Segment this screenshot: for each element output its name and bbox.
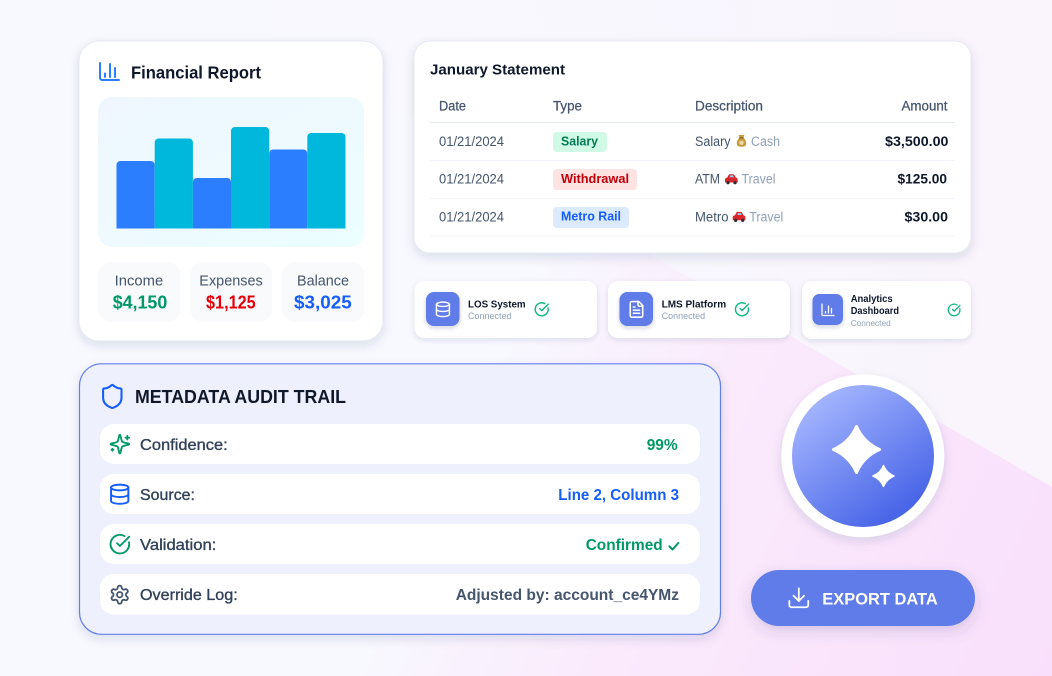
icon: check: [535, 303, 548, 316]
table row: withdrawal: $125.00: [898, 172, 947, 187]
stat: income: $4,150: [113, 292, 167, 312]
icon: car: [733, 212, 745, 222]
stat: income: Income: [115, 274, 163, 290]
card: analytics dashboard: Connected: [851, 318, 891, 328]
row: source: [100, 474, 700, 514]
table row: metro rail: $30.00: [904, 209, 948, 224]
card: analytics dashboard: Analytics: [851, 294, 893, 305]
icon: gear: [112, 586, 128, 604]
table row: withdrawal: ATM: [695, 172, 720, 187]
row: confidence: 99%: [647, 437, 678, 454]
badge: withdrawal: [553, 169, 637, 190]
table row: metro rail: 01/21/2024: [439, 209, 504, 224]
stat: expenses: [190, 262, 272, 322]
stat: balance: [282, 262, 364, 322]
row: validation: [100, 524, 700, 564]
icon: document: [620, 292, 653, 326]
row: source: Line 2, Column 3: [558, 487, 679, 504]
icon: chart: [812, 294, 843, 325]
table row: metro rail: Travel: [749, 209, 783, 224]
stat: income: [98, 262, 180, 322]
icon: sparkles: [111, 435, 129, 453]
table header: Description: [695, 98, 763, 114]
panel: january statement: [414, 41, 971, 253]
table header: [439, 98, 948, 114]
panel: metadata audit trail: [80, 364, 720, 634]
icon: large star: [834, 426, 880, 472]
stat: balance: $3,025: [294, 292, 352, 312]
badge: salary: Salary: [561, 134, 598, 148]
heading: january statement: January Statement: [430, 62, 565, 78]
bar chart: [98, 97, 364, 247]
card: LMS platform: LMS Platform: [662, 299, 726, 310]
icon: check mark: [669, 543, 678, 550]
icon: database: [111, 485, 128, 504]
table row: metro rail: Metro: [695, 209, 728, 224]
card: LOS system: [414, 281, 597, 338]
table row: salary: Salary: [695, 134, 731, 149]
table header: Amount: [902, 98, 948, 114]
badge: salary: [553, 132, 607, 152]
button: export data: EXPORT DATA: [822, 591, 938, 609]
badge: withdrawal: Withdrawal: [561, 172, 629, 186]
icon: check: [948, 304, 960, 316]
button: export data: [751, 570, 975, 626]
row: confidence: Confidence:: [140, 437, 228, 454]
card: LMS platform: Connected: [662, 311, 705, 321]
card: analytics dashboard: [802, 281, 971, 339]
icon: money bag: [737, 135, 746, 147]
icon: bar chart: [100, 63, 119, 80]
table row: salary: [439, 132, 948, 152]
table row: withdrawal: 01/21/2024: [439, 172, 504, 187]
row: override log: [100, 574, 700, 614]
icon: AI sparkle orb: [781, 374, 944, 537]
icon: download: [789, 588, 808, 607]
panel: financial report card: [79, 41, 383, 341]
table row: withdrawal: [439, 169, 947, 190]
card: LOS system: Connected: [468, 311, 512, 321]
table row: metro rail: [439, 207, 948, 228]
heading: metadata audit trail: METADATA AUDIT TRAIL: [135, 387, 346, 407]
table header: Type: [553, 98, 582, 114]
badge: metro rail: Metro Rail: [561, 210, 621, 224]
table row: salary: 01/21/2024: [439, 134, 504, 149]
row: source: Source:: [140, 487, 195, 504]
stat: balance: Balance: [297, 274, 349, 290]
row: validation: Confirmed: [586, 537, 663, 554]
icon: shield: [103, 385, 122, 408]
table header: Date: [439, 98, 466, 114]
card: LMS platform: [608, 281, 790, 338]
row: override log: Override Log:: [140, 587, 238, 604]
table row: salary: Cash: [751, 134, 780, 149]
table row: withdrawal: Travel: [742, 172, 776, 187]
row: override log: Adjusted by: account_ce4YMz: [456, 587, 679, 604]
icon: database: [426, 292, 460, 326]
row: validation: Validation:: [140, 537, 216, 554]
card: analytics dashboard: Dashboard: [851, 306, 899, 317]
stat: expenses: Expenses: [199, 274, 263, 290]
stat: expenses: $1,125: [206, 292, 256, 312]
icon: check: [736, 303, 749, 316]
icon: check circle: [111, 535, 129, 553]
icon: small star: [873, 466, 894, 486]
icon: car: [725, 174, 738, 184]
card: LOS system: LOS System: [468, 299, 526, 310]
row: confidence: [100, 424, 700, 464]
badge: metro rail: [553, 207, 629, 228]
table row: salary: $3,500.00: [885, 134, 948, 149]
heading: financial report: Financial Report: [131, 62, 261, 82]
